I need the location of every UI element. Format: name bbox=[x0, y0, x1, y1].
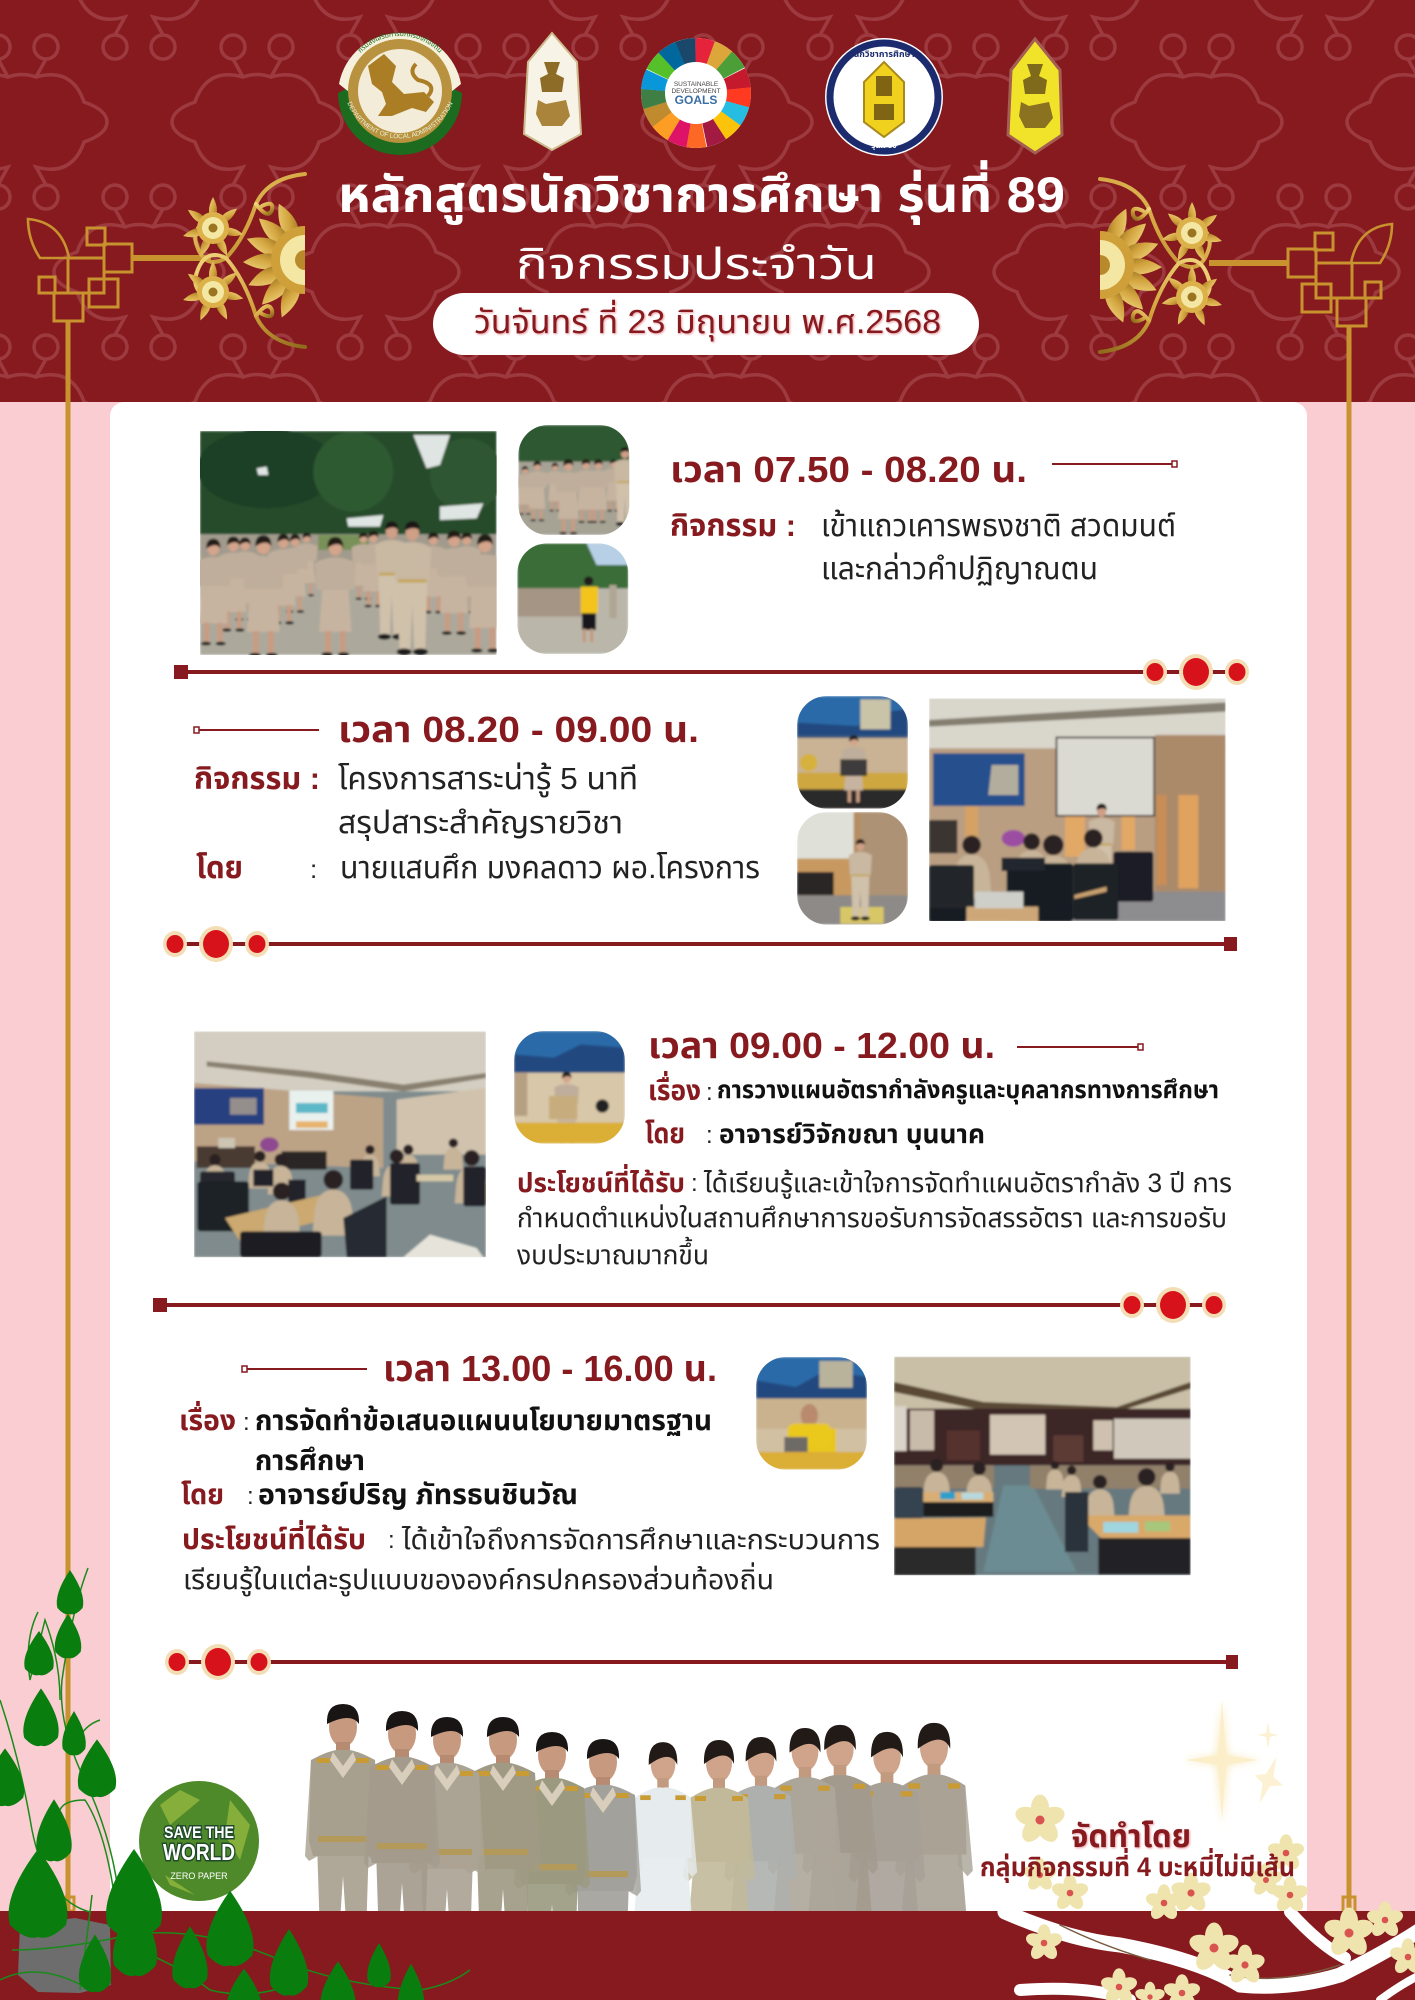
section 4 topic and speaker: โดย bbox=[181, 1479, 224, 1510]
section 2 activity text: : bbox=[310, 854, 317, 884]
photo: speaker round bbox=[797, 696, 908, 809]
section 1 activity text bbox=[670, 508, 1176, 586]
section 3 photos bbox=[194, 1031, 625, 1257]
section 3 benefits: งบประมาณมากขึ้น bbox=[517, 1236, 709, 1270]
panel: white content sheet bbox=[110, 402, 1307, 1942]
section 1 time heading bbox=[670, 449, 1177, 490]
credit text: จัดทำโดย bbox=[1071, 1818, 1191, 1854]
vine bbox=[0, 1568, 470, 2000]
logo: course ring badge bbox=[825, 38, 943, 156]
section 3 benefits: ได้เรียนรู้และเข้าใจการจัดทำแผนอัตรากำลัง 3 ปี การ bbox=[703, 1168, 1232, 1199]
section 4 topic and speaker: อาจารย์ปริญ ภัทรธนชินวัณ bbox=[258, 1479, 578, 1510]
section 4 topic and speaker: การจัดทำข้อเสนอแผนนโยบายมาตรฐาน bbox=[255, 1405, 712, 1436]
badge: save the world bbox=[139, 1781, 259, 1901]
logos row bbox=[338, 30, 1064, 156]
section 2 activity text bbox=[194, 761, 760, 885]
photo: assembly round bottom bbox=[517, 543, 628, 654]
section 3 topic and speaker: อาจารย์วิจักขณา บุนนาค bbox=[719, 1119, 985, 1150]
section 4 benefits: ประโยชน์ที่ได้รับ bbox=[182, 1519, 366, 1555]
footer red band bbox=[0, 1911, 1415, 2000]
photo: seminar room bbox=[929, 698, 1226, 922]
logo: SDG wheel bbox=[635, 32, 757, 154]
photo: conference room bbox=[194, 1031, 489, 1257]
photo: speaker in white round bbox=[514, 1031, 625, 1144]
section 2 activity text: นายแสนศึก มงคลดาว ผอ.โครงการ bbox=[340, 850, 760, 885]
section 2 time heading: เวลา 08.20 - 09.00 น. bbox=[338, 709, 699, 750]
badge: save the world: ZERO PAPER bbox=[170, 1871, 228, 1881]
photo: assembly round top bbox=[517, 425, 636, 535]
logo: Department of Local Administration seal: กรมส่งเสริมการปกครองท้องถิ่น bbox=[358, 30, 442, 53]
section 4 topic and speaker: : bbox=[243, 1409, 250, 1436]
logo: course ring badge: นักวิชาการศึกษา bbox=[853, 49, 915, 59]
section 2 activity text: สรุปสาระสำคัญรายวิชา bbox=[338, 805, 623, 841]
badge: save the world: WORLD bbox=[163, 1839, 235, 1865]
left gold ornament bbox=[28, 174, 339, 347]
section 3 topic and speaker: การวางแผนอัตรากำลังครูและบุคลากรทางการศึกษา bbox=[717, 1076, 1219, 1105]
photo: assembly wide bbox=[195, 428, 505, 657]
section 2 activity text: โครงการสาระน่ารู้ 5 นาที bbox=[338, 761, 638, 797]
group photo bbox=[305, 1704, 973, 1986]
section 4 topic and speaker bbox=[179, 1400, 712, 1510]
section 1 time heading: เวลา 07.50 - 08.20 น. bbox=[670, 449, 1027, 490]
section 4 time heading: เวลา 13.00 - 16.00 น. bbox=[383, 1348, 717, 1389]
date pill bbox=[433, 293, 979, 355]
right gold ornament bbox=[1066, 179, 1392, 352]
photo: lecture room audience bbox=[894, 1357, 1191, 1575]
section 1 activity text: กิจกรรม : bbox=[670, 508, 796, 543]
rock bbox=[18, 1918, 111, 1993]
section 2 photos bbox=[797, 696, 1226, 925]
divider 2 bbox=[163, 926, 1237, 962]
logo: Department of Local Administration seal: DEPARTMENT OF LOCAL ADMINISTRATION bbox=[348, 102, 453, 138]
logo: Department of Local Administration seal bbox=[338, 30, 462, 155]
divider 3 bbox=[153, 1287, 1226, 1323]
section 3 benefits: : bbox=[691, 1170, 698, 1197]
section 2 activity text: กิจกรรม : bbox=[194, 761, 320, 796]
section 4 photos bbox=[756, 1357, 1191, 1575]
logo: SDG wheel: GOALS bbox=[675, 93, 717, 107]
logo: cream shield bbox=[524, 33, 581, 150]
icon: sparkle stars bbox=[1182, 1700, 1292, 1825]
section 1 activity text: เข้าแถวเคารพธงชาติ สวดมนต์ bbox=[821, 508, 1176, 543]
section 3 topic and speaker bbox=[645, 1070, 1219, 1150]
gold vertical rods bbox=[62, 322, 1355, 1912]
flowers bbox=[1013, 1794, 1415, 2000]
section 3 time heading bbox=[648, 1025, 1143, 1066]
tree branches bbox=[1005, 1912, 1415, 2000]
subtitle: กิจกรรมประจำวัน bbox=[516, 240, 877, 289]
section 3 benefits bbox=[517, 1164, 1232, 1270]
section 3 time heading: เวลา 09.00 - 12.00 น. bbox=[648, 1025, 995, 1066]
divider 1 bbox=[174, 654, 1249, 690]
date pill: วันจันทร์ ที่ 23 มิถุนายน พ.ศ.2568 bbox=[474, 299, 941, 342]
section 4 benefits: ได้เข้าใจถึงการจัดการศึกษาและกระบวนการ bbox=[401, 1524, 880, 1555]
panel: header band bbox=[0, 0, 1415, 402]
section 1 activity text: และกล่าวคำปฏิญาณตน bbox=[821, 551, 1098, 586]
logo: SDG wheel: DEVELOPMENT bbox=[671, 88, 721, 95]
section 1 photos bbox=[195, 425, 636, 657]
section 3 topic and speaker: โดย bbox=[645, 1118, 685, 1149]
badge: save the world: SAVE THE bbox=[164, 1823, 234, 1842]
section 4 benefits: : bbox=[388, 1527, 395, 1554]
title: หลักสูตรนักวิชาการศึกษา รุ่นที่ 89 bbox=[338, 160, 1065, 225]
logo: course ring badge: รุ่นที่ 89 bbox=[871, 139, 897, 150]
section 3 topic and speaker: : bbox=[706, 1122, 713, 1149]
photo: presenter round bbox=[797, 812, 908, 925]
credit group name: กลุ่มกิจกรรมที่ 4 บะหมี่ไม่มีเส้น bbox=[980, 1848, 1295, 1883]
section 4 topic and speaker: เรื่อง bbox=[179, 1400, 236, 1436]
photo: speaker in yellow round bbox=[756, 1357, 867, 1470]
section 3 topic and speaker: เรื่อง bbox=[648, 1070, 701, 1106]
section 4 topic and speaker: การศึกษา bbox=[255, 1445, 365, 1476]
section 3 benefits: กำหนดตำแหน่งในสถานศึกษาการขอรับการจัดสรรอัตรา และการขอรับ bbox=[517, 1203, 1227, 1233]
section 2 time heading bbox=[194, 709, 699, 750]
section 3 topic and speaker: : bbox=[706, 1079, 713, 1106]
logo: yellow shield bbox=[1008, 39, 1062, 153]
divider 4 bbox=[165, 1644, 1238, 1680]
section 4 topic and speaker: : bbox=[247, 1483, 254, 1510]
section 4 benefits bbox=[182, 1519, 880, 1597]
logo: SDG wheel: SUSTAINABLE bbox=[674, 81, 719, 88]
section 3 benefits: ประโยชน์ที่ได้รับ bbox=[517, 1164, 685, 1198]
section 2 activity text: โดย bbox=[196, 850, 243, 885]
section 4 benefits: เรียนรู้ในแต่ละรูปแบบขององค์กรปกครองส่วนท้องถิ่น bbox=[183, 1562, 774, 1597]
